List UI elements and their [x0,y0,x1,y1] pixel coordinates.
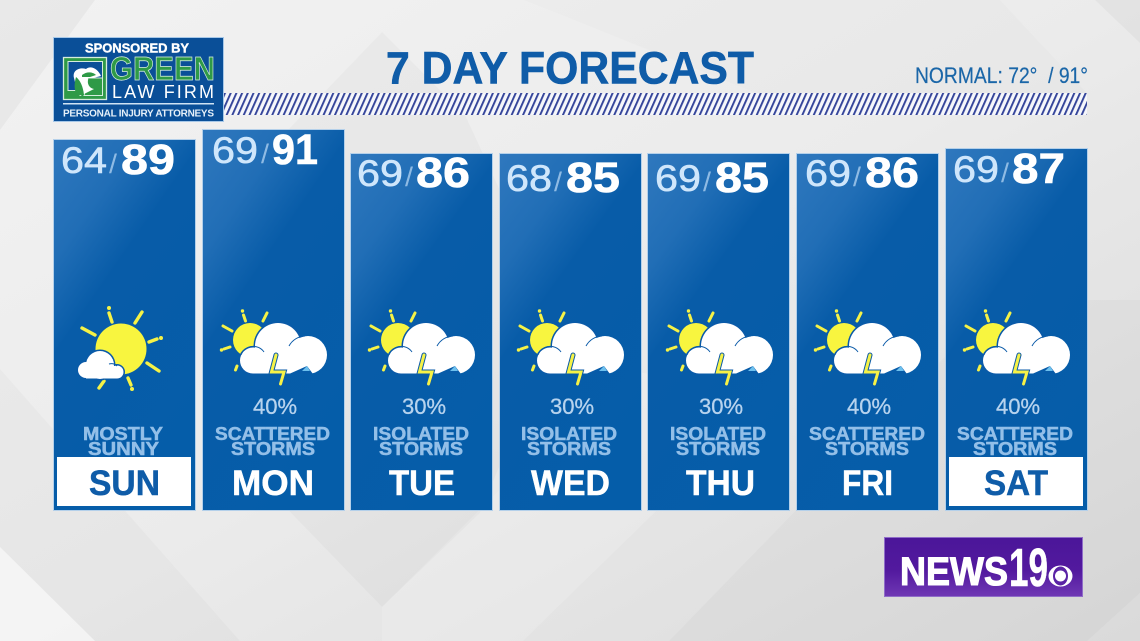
Tuesday condition [373,424,469,459]
icon: firm emblem [64,58,106,100]
Wednesday condition: STORMS [527,439,611,459]
icon: storms with sun [517,309,624,384]
Sunday condition: MOSTLY [83,424,163,444]
Tuesday low and high: / [405,162,414,192]
Tuesday condition: ISOLATED [373,424,469,444]
Monday label: MON [232,464,314,503]
Wednesday condition: ISOLATED [521,424,617,444]
Tuesday low and high [357,149,470,197]
Friday condition: STORMS [825,439,909,459]
Thursday condition: ISOLATED [670,424,766,444]
Tuesday label: TUE [389,464,455,503]
Sunday low and high: 64 [61,140,107,181]
Sunday low and high: / [109,149,118,179]
Wednesday label: WED [531,464,610,503]
Friday chance of rain: 40% [847,394,891,419]
Thursday chance of rain: 30% [699,394,743,419]
station logo [884,538,1082,598]
Friday low and high [805,149,919,197]
panel: Friday [796,149,938,510]
firm tagline: PERSONAL INJURY ATTORNEYS [63,108,214,120]
firm name: GREEN [110,50,215,87]
Tuesday low and high: 69 [357,153,403,194]
panel: Sunday [54,136,196,510]
Saturday condition: STORMS [973,439,1057,459]
Wednesday low and high [506,154,620,202]
panel: Thursday [648,154,790,510]
icon: storms with sun [963,309,1070,384]
Thursday label: THU [686,464,755,503]
Thursday low and high: / [703,167,712,197]
Wednesday low and high: / [554,167,563,197]
Monday condition: SCATTERED [215,424,330,444]
Monday chance of rain: 40% [253,394,297,419]
Sunday low and high [61,136,175,184]
icon: storms with sun [666,309,773,384]
icon: CBS eye [1048,566,1072,586]
sponsor heading: SPONSORED BY [85,40,189,56]
firm name line two: LAW FIRM [112,82,214,102]
Saturday low and high: 69 [953,149,999,190]
Saturday label: SAT [984,464,1048,503]
panel: Saturday [946,145,1088,510]
Sunday low and high: 89 [121,136,175,184]
Tuesday chance of rain: 30% [402,394,446,419]
Friday label: FRI [842,464,893,503]
Wednesday low and high: 68 [506,158,552,199]
icon: storms with sun [220,309,327,384]
Thursday low and high [655,154,769,202]
icon: mostly sunny [77,306,163,391]
Saturday label [949,457,1083,506]
Saturday condition [957,424,1073,459]
icon: storms with sun [368,309,475,384]
Saturday low and high: / [1001,158,1010,188]
panel: Monday [202,126,344,510]
Monday condition [215,424,330,459]
Thursday low and high: 69 [655,158,701,199]
Friday condition [809,424,925,459]
Wednesday low and high: 85 [566,154,620,202]
Sunday condition: SUNNY [88,439,159,459]
Tuesday condition: STORMS [379,439,463,459]
station number: 19 [1009,538,1048,598]
Thursday condition [670,424,766,459]
Wednesday chance of rain: 30% [550,394,594,419]
Saturday chance of rain: 40% [996,394,1040,419]
Sunday label [57,457,191,506]
Monday low and high: / [261,139,270,169]
Monday low and high [212,126,318,174]
panel: Tuesday [350,149,492,510]
Friday low and high: 69 [805,153,851,194]
Wednesday condition [521,424,617,459]
Friday low and high: 86 [865,149,919,197]
title: 7 DAY FORECAST [386,42,754,94]
Saturday low and high [953,145,1065,193]
Monday condition: STORMS [231,439,315,459]
Sunday condition [83,424,163,459]
icon: storms with sun [814,309,921,384]
panel: Wednesday [500,154,642,510]
Friday low and high: / [853,162,862,192]
sponsor logo [54,38,224,122]
Sunday label: SUN [89,464,160,503]
station name: NEWS [900,550,1008,594]
Monday low and high: 91 [272,126,318,174]
Saturday condition: SCATTERED [957,424,1073,444]
normal temperatures: NORMAL: 72° / 91° [915,63,1088,88]
Thursday condition: STORMS [676,439,760,459]
Saturday low and high: 87 [1012,145,1065,193]
Thursday low and high: 85 [715,154,769,202]
Tuesday low and high: 86 [416,149,470,197]
hatched header bar [224,93,1087,115]
Monday low and high: 69 [212,130,258,171]
Friday condition: SCATTERED [809,424,925,444]
